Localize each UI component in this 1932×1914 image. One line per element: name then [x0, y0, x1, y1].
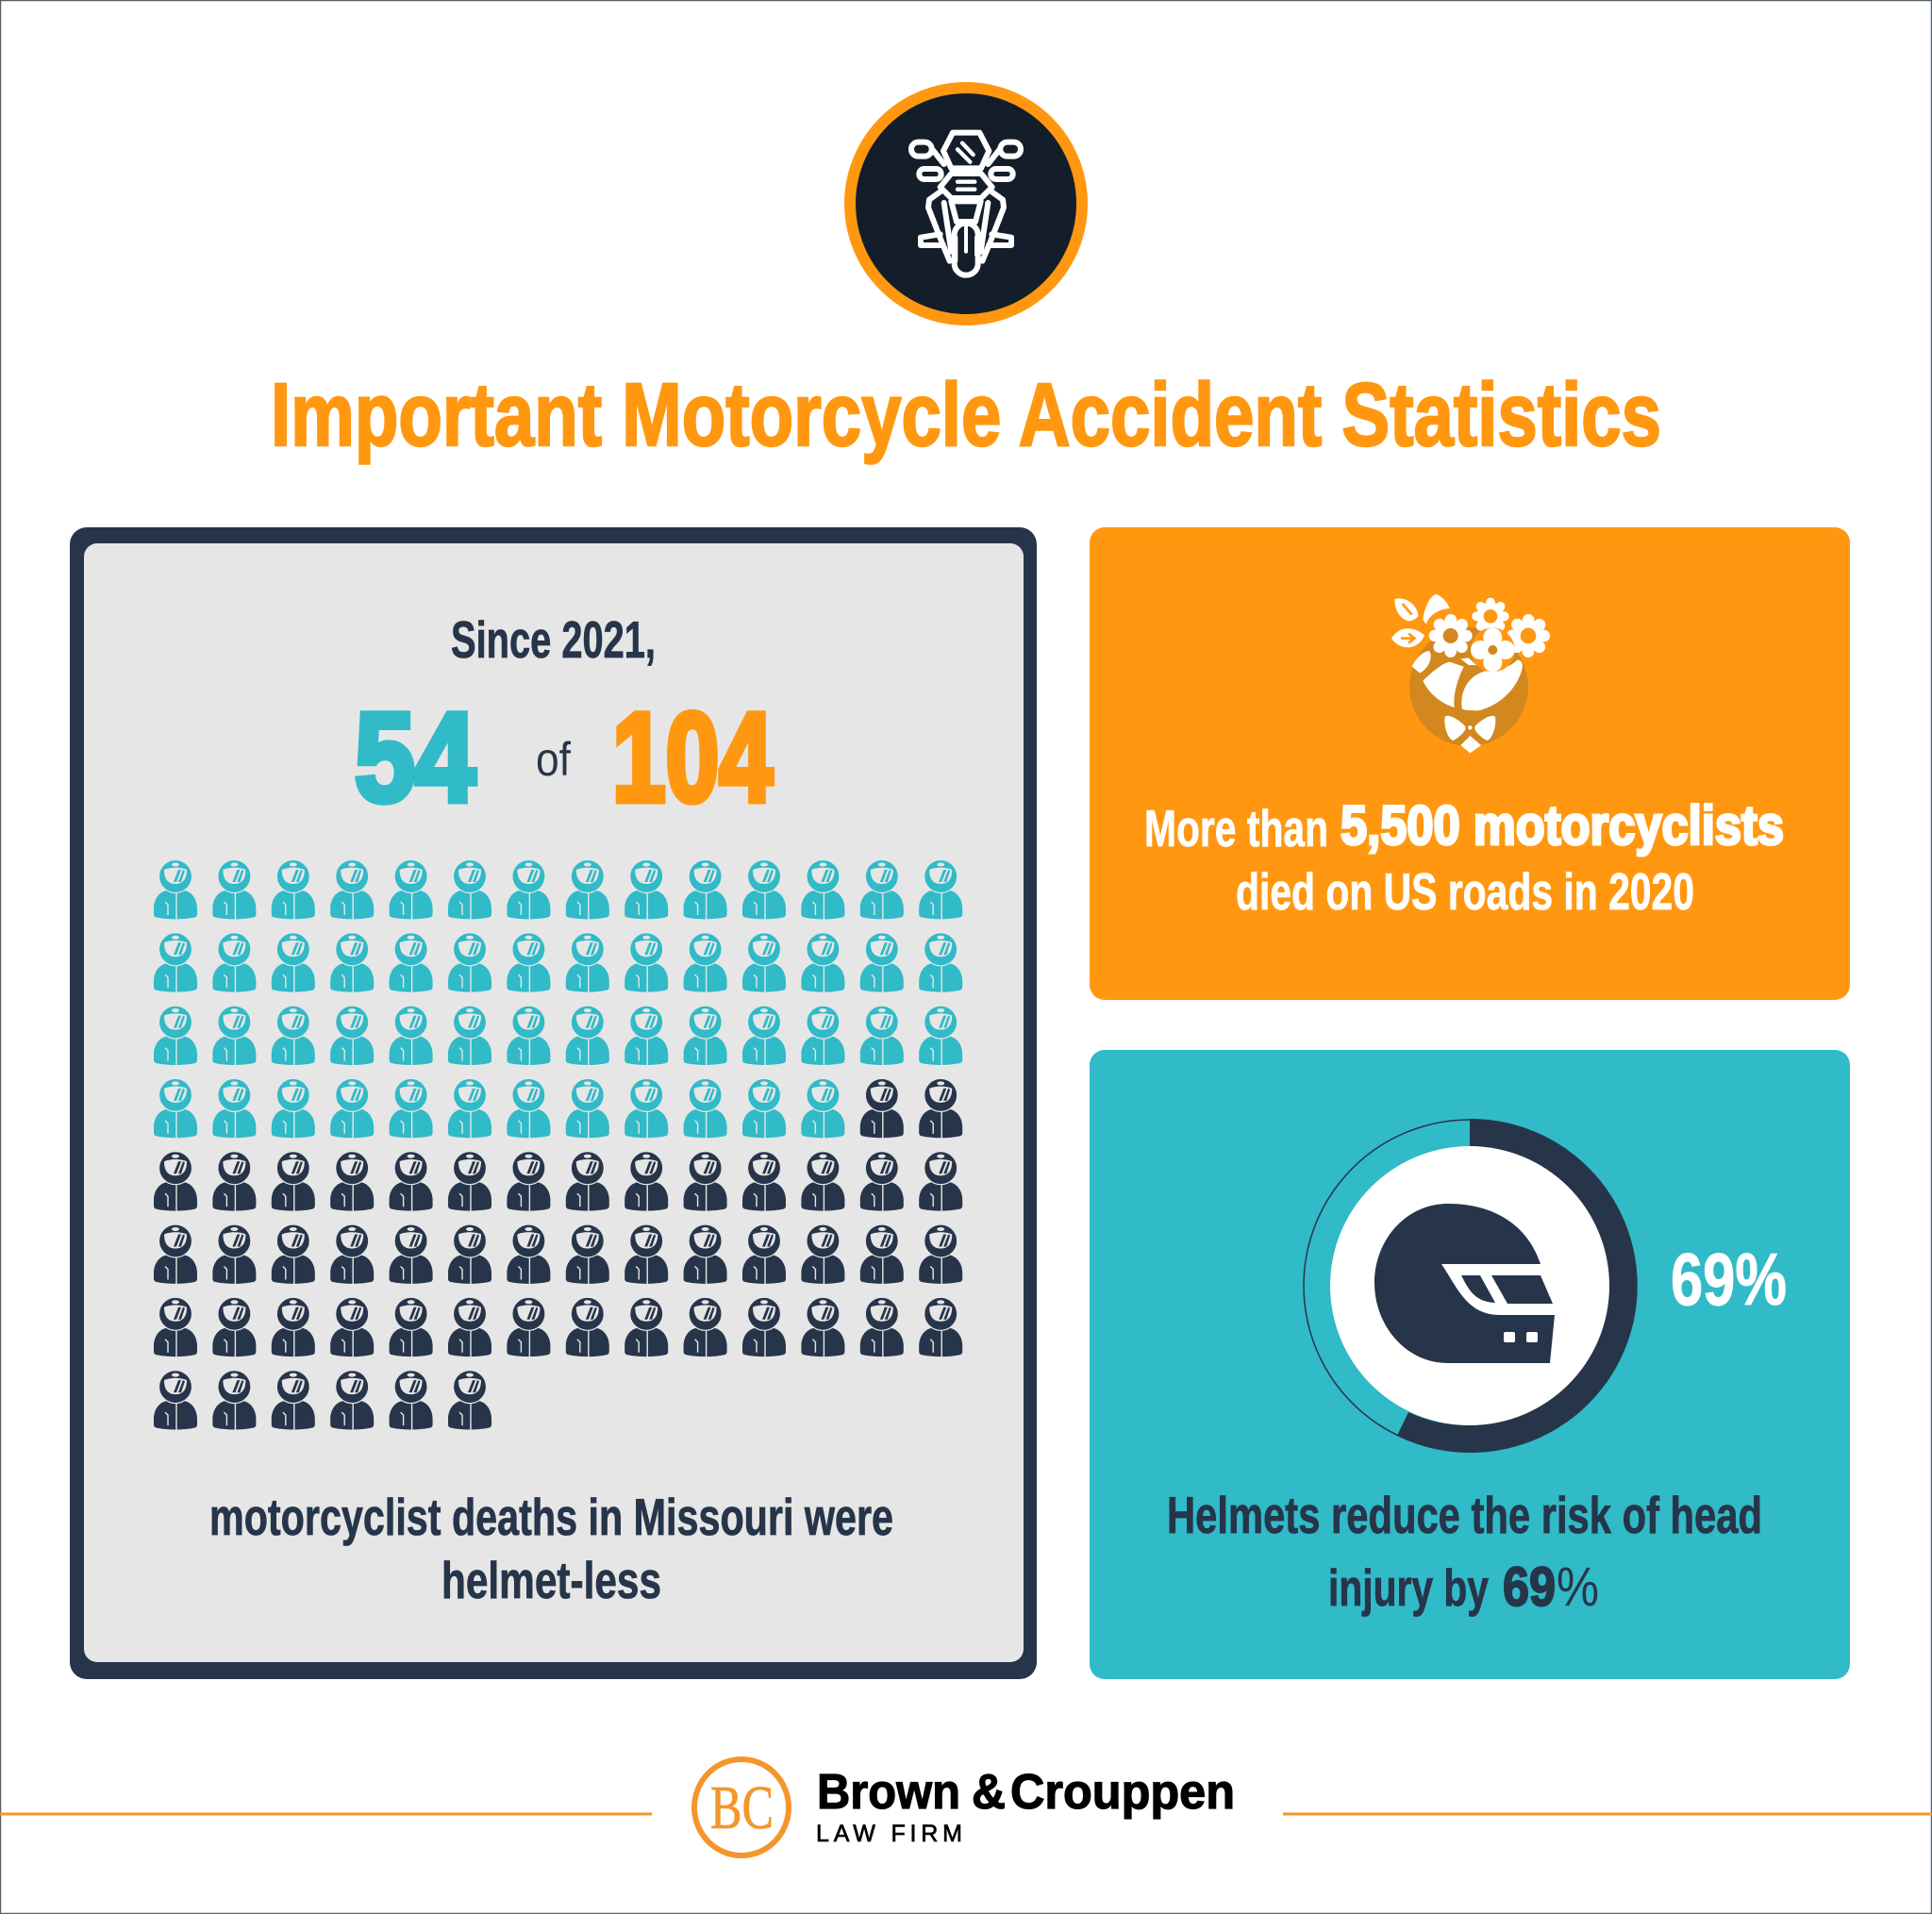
- text: more than 5,500 motorcyclists: [1144, 795, 1784, 921]
- text: since 2021: Since 2021,: [451, 610, 656, 669]
- icon: helmet: [1374, 1204, 1555, 1363]
- text: helmets reduce risk: injury by: [1328, 1558, 1489, 1617]
- text: helmets reduce risk: 69: [1503, 1556, 1556, 1618]
- text: firm name: Crouppen: [1010, 1765, 1235, 1820]
- text: firm name: [817, 1765, 1235, 1820]
- text: more than 5,500 motorcyclists: died on US roads in 2020: [1236, 862, 1694, 921]
- text: deaths caption: helmet-less: [441, 1551, 661, 1609]
- icon: flower bouquet: [1391, 594, 1544, 753]
- stat: 104: 104: [612, 688, 773, 828]
- text: helmets reduce risk: Helmets reduce the risk of head: [1167, 1486, 1762, 1544]
- text: firm name: Brown: [817, 1765, 960, 1820]
- panel: Missouri helmet-less deaths: [70, 527, 1037, 1679]
- stat: 69 percent: 69%: [1671, 1238, 1787, 1321]
- panel: helmet risk reduction: [1090, 1050, 1850, 1679]
- text: helmets reduce risk: %: [1557, 1556, 1599, 1618]
- text: firm name: &: [972, 1765, 1006, 1820]
- text: of: of: [536, 733, 571, 786]
- text: law firm: LAW FIRM: [816, 1821, 962, 1847]
- text: more than 5,500 motorcyclists: More than: [1144, 799, 1328, 857]
- text: deaths caption: motorcyclist deaths in Missouri were: [209, 1488, 893, 1546]
- panel: US road deaths: [1090, 527, 1850, 1000]
- icon: BC monogram: BC: [710, 1773, 774, 1842]
- stat: 54: 54: [355, 688, 475, 828]
- icon: motorcycle badge: [850, 88, 1082, 320]
- text: more than 5,500 motorcyclists: 5,500 motorcyclists: [1341, 795, 1784, 857]
- text: deaths caption: [209, 1488, 893, 1609]
- pictogram: 104 riders, 54 teal and 50 navy: [154, 860, 962, 1430]
- icon: BC monogram: [694, 1759, 789, 1856]
- logo: Brown & Crouppen Law Firm: [694, 1759, 1235, 1856]
- text: helmets reduce risk: [1167, 1486, 1762, 1618]
- chart: 69 percent donut with helmet: [1304, 1119, 1638, 1453]
